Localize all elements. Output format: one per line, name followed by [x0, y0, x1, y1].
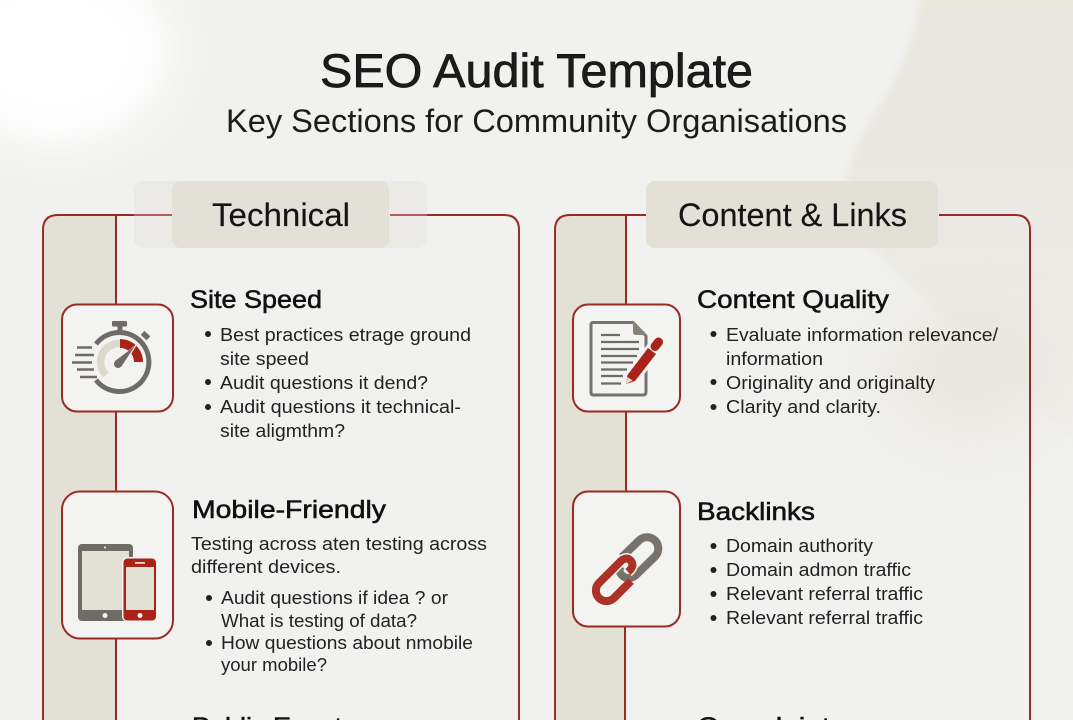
sidebar: content and links	[556, 215, 626, 720]
section: backlinks: Relevant referral traffic	[726, 584, 923, 604]
panel frame: content and links	[555, 215, 1030, 720]
icon: chain link	[573, 492, 680, 626]
section: site speed: site aligmthm?	[220, 421, 345, 441]
section: site speed: Audit questions it dend?	[220, 373, 428, 393]
section: backlinks: Backlinks	[697, 498, 815, 526]
icon: tablet and phone	[62, 492, 173, 638]
section: backlinks: Relevant referral traffic	[726, 608, 923, 628]
section: content quality: Clarity and clarity.	[726, 397, 881, 417]
section: site speed	[190, 286, 471, 441]
tab: content and links	[646, 181, 938, 248]
sidebar: technical	[44, 215, 116, 720]
icon: stopwatch	[62, 304, 173, 412]
section: mobile-friendly: How questions about nmobile	[221, 633, 473, 653]
section: backlinks: Domain admon traffic	[726, 560, 911, 580]
section: content quality: information	[726, 349, 823, 369]
section: mobile-friendly: different devices.	[191, 557, 341, 577]
section: mobile-friendly: What is testing of data?	[221, 611, 417, 631]
section: mobile-friendly: Testing across aten testing across	[191, 534, 487, 554]
panel: content and links	[555, 181, 1030, 720]
panel: technical	[43, 181, 519, 720]
section: mobile-friendly	[191, 496, 487, 675]
subtitle: Key Sections for Community Organisations	[226, 103, 847, 139]
section: content quality	[697, 286, 998, 417]
section: content quality: Evaluate information relevance/	[726, 325, 998, 345]
section: mobile-friendly: your mobile?	[221, 655, 327, 675]
section: content quality: Originality and originalty	[726, 373, 935, 393]
section: mobile-friendly: Mobile-Friendly	[192, 496, 387, 524]
section: mobile-friendly: Audit questions if idea ? or	[221, 588, 448, 608]
icon: document and pencil	[573, 304, 680, 412]
section: backlinks: Domain authority	[726, 536, 873, 556]
section: site speed: site speed	[220, 349, 309, 369]
tab: content and links: Content & Links	[678, 197, 907, 233]
panel frame: technical	[43, 215, 519, 720]
title: SEO Audit Template	[320, 44, 753, 97]
section: content quality: Content Quality	[697, 286, 890, 314]
tab: technical: Technical	[212, 197, 350, 233]
section: site speed: Best practices etrage ground	[220, 325, 471, 345]
tab: technical	[134, 181, 427, 248]
section: site speed: Site Speed	[190, 286, 322, 314]
section: backlinks	[697, 498, 923, 628]
section: site speed: Audit questions it technical-	[220, 397, 461, 417]
